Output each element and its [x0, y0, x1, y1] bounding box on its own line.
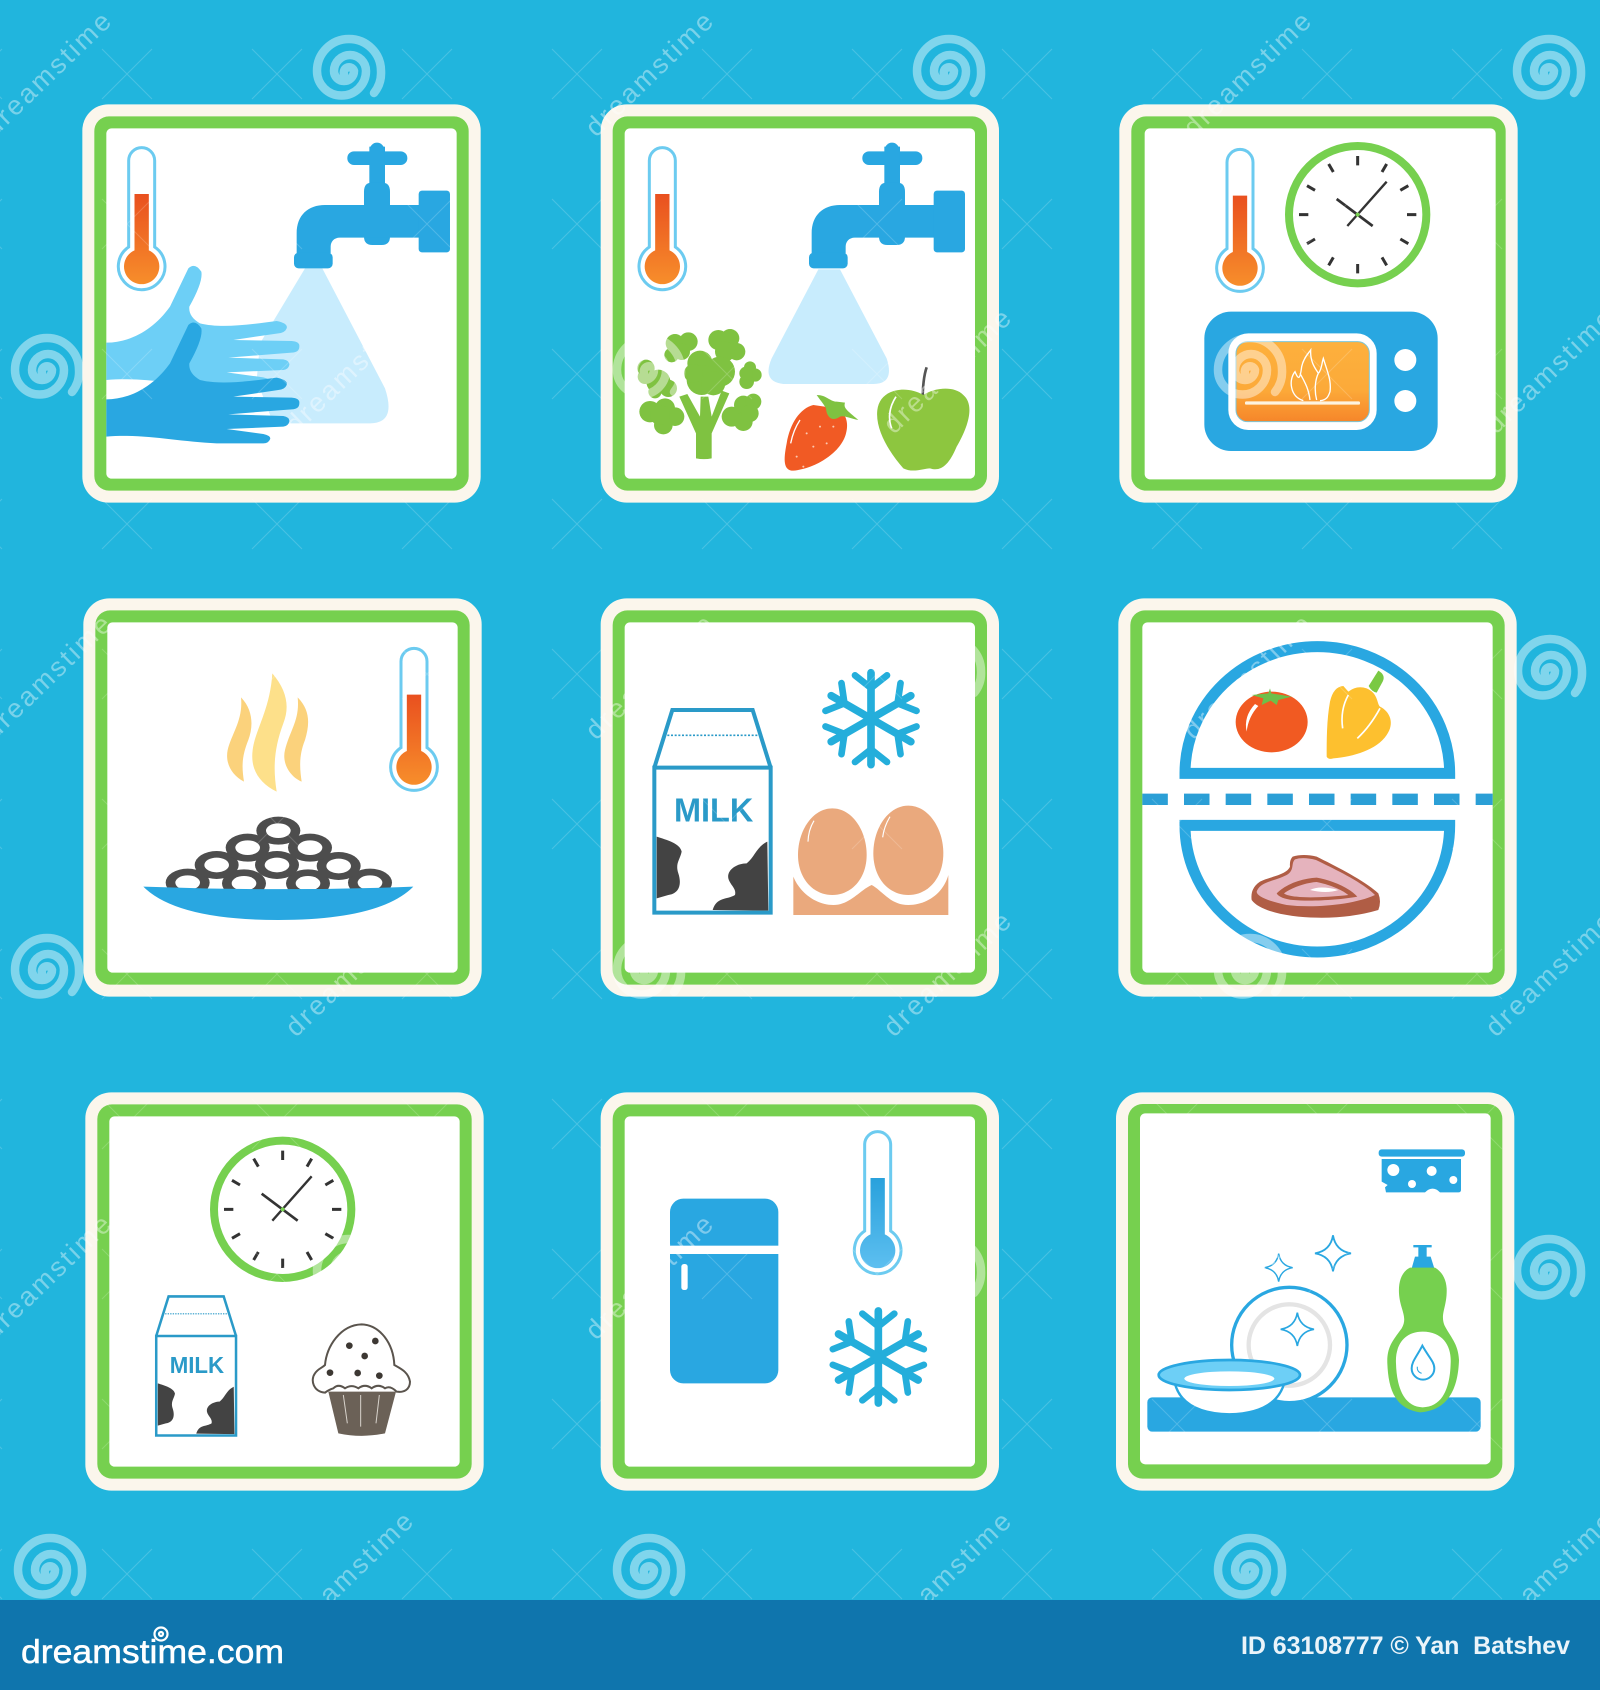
panel: clean dishes	[1116, 1092, 1514, 1491]
icon: snowflake	[830, 1311, 926, 1403]
watermark: dreamstime text: dreamstime	[1177, 1209, 1317, 1345]
watermark: dreamstime text: dreamstime	[1177, 6, 1317, 142]
watermark: dreamstime text: dreamstime	[877, 1506, 1017, 1642]
panel: fridge and cold temperature	[601, 1092, 999, 1491]
icon: plate of food	[143, 817, 413, 920]
watermark: dreamstime text: dreamstime	[877, 906, 1017, 1042]
icon: clock	[1289, 146, 1426, 283]
icon: upper half container	[1185, 647, 1450, 773]
icon: lower half container	[1185, 825, 1450, 952]
panel: wash vegetables and fruit	[601, 104, 999, 503]
panel: time limit for milk and muffin	[85, 1092, 484, 1491]
icon: eggs	[793, 806, 948, 915]
icon: faucet	[809, 143, 965, 268]
icon: milk carton: MILK	[674, 792, 753, 829]
icon: dish soap bottle	[1387, 1245, 1459, 1412]
icon: microwave oven	[1204, 312, 1438, 451]
icon: faucet	[294, 143, 450, 268]
icon: milk carton: MILK	[170, 1352, 225, 1378]
icon: steam	[227, 673, 308, 792]
icon: dark hand	[106, 322, 299, 443]
icon: light hand	[106, 266, 299, 387]
icon: thermometer hot	[1217, 149, 1263, 291]
watermark: dreamstime text: dreamstime	[1177, 609, 1317, 745]
icon: steak	[1251, 855, 1380, 918]
icon: refrigerator	[669, 1199, 780, 1383]
panel: cook food thoroughly	[83, 598, 482, 997]
icon: strawberry	[785, 395, 858, 471]
watermark: dreamstime text: dreamstime	[579, 1209, 719, 1345]
icon: thermometer hot	[639, 148, 686, 290]
watermark: dreamstime text: dreamstime	[279, 303, 419, 439]
icon: milk carton	[654, 710, 771, 913]
icon: sponge	[1379, 1149, 1465, 1192]
icon: thermometer hot	[391, 648, 437, 790]
icon: thermometer cold	[854, 1132, 901, 1274]
watermark: dreamstime text: dreamstime	[579, 6, 719, 142]
icon: bowl	[1159, 1360, 1300, 1414]
icon: countertop	[1147, 1397, 1481, 1432]
watermark: dreamstime text: dreamstime	[877, 303, 1017, 439]
icon: thermometer hot	[118, 148, 165, 290]
panel: refrigerate milk and eggs	[601, 598, 999, 997]
panel: wash hands under warm water	[82, 104, 481, 503]
footer logo text: dreamstime.com	[21, 1633, 284, 1670]
icon: water spray	[257, 268, 389, 423]
icon: water spray	[769, 269, 889, 384]
footer logo spiral	[154, 1628, 168, 1640]
watermark: dreamstime text: dreamstime	[279, 906, 419, 1042]
icon: muffin	[313, 1324, 410, 1436]
footer credit text: ID 63108777 © Yan Batshev	[1241, 1632, 1570, 1660]
icon: milk carton	[156, 1296, 236, 1435]
watermark: dreamstime text: dreamstime	[579, 609, 719, 745]
icon: apple	[877, 367, 969, 471]
icon: yellow pepper	[1327, 671, 1391, 759]
icon: broccoli	[637, 329, 762, 459]
icon: clock	[214, 1141, 351, 1278]
footer bar	[0, 1600, 1600, 1690]
icon: sparkles	[1265, 1235, 1351, 1346]
icon: snowflake	[823, 673, 919, 765]
panel: microwave reheating	[1119, 104, 1518, 503]
icon: plate	[1232, 1287, 1347, 1403]
panel: separate produce and meat	[1118, 598, 1517, 997]
divider: dashed line	[1142, 782, 1493, 816]
watermark: dreamstime text: dreamstime	[279, 1506, 419, 1642]
icon: tomato	[1236, 688, 1308, 752]
